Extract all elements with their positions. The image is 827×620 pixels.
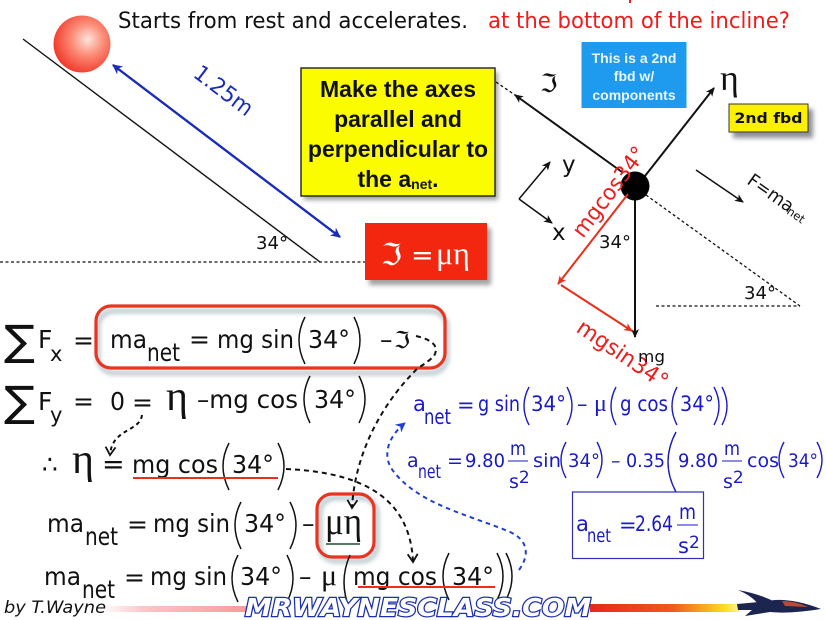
diagram: free body diagram	[496, 58, 808, 395]
blue equation: a net symbolic: g cos	[620, 392, 668, 416]
equation: ma net with mu eta: μη	[325, 501, 362, 543]
result box: a net equals 2.64: a	[576, 512, 589, 536]
equation: therefore normal force	[42, 437, 284, 490]
diagram: incline with ball	[0, 16, 366, 262]
footer: flame trail	[590, 604, 740, 612]
equation group: sum of forces x	[4, 306, 447, 373]
label mgsin34: mgsin34°	[572, 315, 673, 395]
equation text: 34°	[308, 325, 350, 354]
equation: ma net with mu eta: net	[85, 522, 118, 551]
blue equation: a net numeric: s	[723, 471, 733, 493]
result box: a net equals 2.64: 2.64	[635, 512, 673, 536]
blue equation: a net numeric: 34°	[568, 450, 600, 472]
result box: a net equals 2.64: net	[587, 525, 611, 547]
normal arrow	[645, 88, 714, 176]
label mgcos34: mgcos34°	[568, 142, 652, 243]
equation: sum of forces y: y	[50, 403, 62, 427]
label mg: mg	[638, 347, 665, 366]
dotted arrow: mg cos to final equation	[286, 469, 413, 562]
blue equation: a net numeric: m	[510, 438, 526, 460]
equation: sum of forces y: F	[38, 387, 52, 416]
equation text: =	[73, 326, 94, 355]
dotted arrow: eta substitution	[110, 415, 142, 455]
blue equation: a net symbolic: μ	[594, 391, 607, 417]
label F=ma net: F=ma	[743, 170, 798, 217]
blue equation: a net numeric: s	[509, 471, 519, 493]
normal symbol: η	[720, 58, 739, 98]
equation: sum of forces y: –mg cos	[197, 385, 298, 414]
red underline	[133, 477, 278, 479]
dotted horizontal	[656, 305, 800, 307]
equation text: ma	[110, 325, 147, 354]
red underline	[358, 586, 495, 588]
equation text: –	[380, 325, 392, 354]
callout: 2nd fbd with components	[582, 42, 686, 108]
label net subscript: net	[784, 204, 808, 227]
blue equation: a net symbolic: –	[577, 392, 588, 416]
axes arrows	[519, 162, 552, 223]
callout: 2nd fbd with components: This is a 2nd	[592, 50, 676, 66]
red highlight box	[96, 306, 447, 373]
blue equation: a net symbolic: g sin	[478, 392, 520, 416]
equation: sum of forces y: =	[73, 387, 94, 416]
incline base dotted line	[0, 261, 366, 263]
callout: make the axes parallel: .	[432, 166, 439, 192]
blue equation: a net numeric: 2	[733, 468, 744, 488]
label: 2nd fbd: 2nd fbd	[734, 111, 802, 127]
icon: rocket	[737, 590, 821, 616]
equation: sum of forces y: ∑	[4, 377, 35, 426]
equation: therefore normal force: η	[72, 437, 94, 483]
acceleration direction arrow	[696, 170, 743, 202]
body	[620, 172, 650, 200]
callout: friction formula: ℑ	[381, 238, 402, 273]
callout: friction formula: =	[411, 240, 434, 271]
incline surface	[23, 39, 320, 262]
equation text: mg sin	[217, 325, 294, 354]
result box: a net equals 2.64: s	[678, 534, 689, 558]
equation: sum of forces y: =	[132, 388, 153, 417]
angle at dotted incline: 34°	[744, 283, 776, 304]
blue equation: a net numeric: cos	[747, 450, 779, 472]
equation: sum of forces y: η	[166, 374, 188, 420]
equation: final ma net: 34°	[240, 562, 282, 591]
blue equation: a net symbolic	[413, 387, 727, 429]
friction symbol: ℑ	[540, 69, 557, 98]
blue equation: a net numeric: 0.35	[626, 450, 665, 472]
distance label: 1.25m	[188, 61, 258, 122]
callout: make the axes parallel: perpendicular to	[308, 136, 488, 162]
sigma: ∑	[4, 316, 35, 365]
blue equation: a net numeric: 9.80	[678, 450, 718, 472]
cropped descender of upper question line	[629, 0, 631, 3]
heading: starts from rest: Starts from rest and accelerates.	[118, 8, 468, 34]
equation text: =	[189, 325, 210, 354]
equation: sum of forces y: 34°	[314, 385, 356, 414]
equation text: ℑ	[394, 328, 410, 354]
weight component mgcos arrow	[558, 194, 628, 284]
blue equation: a net numeric: sin	[533, 450, 561, 472]
result box: a net equals 2.64	[572, 492, 704, 558]
equation: ma net with mu eta: –	[302, 509, 314, 538]
equation: therefore normal force: =	[102, 449, 125, 480]
equation: final ma net: net	[82, 575, 115, 604]
green underline	[326, 543, 360, 545]
equation: ma net with mu eta: ma	[47, 509, 84, 538]
blue equation: a net numeric: 2	[519, 468, 530, 488]
blue equation: a net symbolic: net	[424, 405, 451, 429]
equation: final ma net: mg cos	[353, 562, 437, 591]
distance arrow	[113, 65, 340, 237]
footer: author credit: by T.Wayne	[4, 598, 106, 618]
equation: ma net with mu eta: =	[127, 510, 148, 539]
equation: final ma net	[44, 553, 512, 610]
equation text: net	[147, 338, 180, 367]
equation: final ma net: μ	[321, 559, 337, 592]
axis y: y	[562, 152, 576, 178]
equation: final ma net: –	[299, 562, 312, 591]
callout: friction formula: μη	[436, 235, 470, 271]
angle at body: 34°	[599, 232, 631, 253]
callout: friction formula	[365, 223, 491, 285]
blue equation: a net numeric: 9.80	[465, 450, 505, 472]
weight component mgsin arrow	[561, 285, 632, 331]
axis x: x	[552, 220, 566, 246]
footer: pink trail	[100, 606, 250, 612]
equation: therefore normal force: 34°	[232, 450, 274, 479]
blue equation: a net numeric: m	[724, 438, 740, 460]
blue equation: a net symbolic: 34°	[531, 392, 566, 416]
equation: final ma net: =	[124, 563, 145, 592]
highlight box	[317, 494, 377, 561]
equation: final ma net: mg sin	[150, 562, 227, 591]
blue equation: a net numeric: net	[418, 461, 441, 483]
equation: final ma net: ma	[44, 562, 81, 591]
equation: final ma net: 34°	[452, 562, 494, 591]
equation: therefore normal force: mg cos	[132, 450, 218, 479]
equation: ma net with mu eta: 34°	[244, 509, 286, 538]
callout: 2nd fbd with components: fbd w/	[614, 68, 654, 84]
blue equation: a net numeric: a	[407, 450, 419, 472]
callout: make the axes parallel: Make the axes	[320, 76, 476, 102]
equation: ma net with mu eta: mg sin	[153, 509, 230, 538]
equation: ma net with mu eta	[47, 494, 377, 561]
blue equation: a net symbolic: a	[413, 392, 426, 416]
equation: sum of forces y	[4, 374, 365, 427]
equation: sum of forces y: 0	[110, 387, 125, 416]
equation text: x	[50, 342, 62, 366]
equation text	[38, 317, 410, 367]
result box: a net equals 2.64: 2	[689, 533, 700, 553]
dotted arrow: friction to mu eta	[352, 336, 436, 508]
label: 2nd fbd	[729, 104, 813, 138]
result box: a net equals 2.64: m	[679, 500, 696, 524]
callout: make the axes parallel	[301, 68, 498, 200]
weight arrow	[634, 198, 636, 337]
dotted extension of incline	[496, 82, 515, 95]
equation text: F	[38, 325, 52, 354]
red ball	[54, 16, 110, 72]
equation: therefore normal force: ∴	[42, 450, 58, 479]
incline angle: 34°	[256, 233, 288, 254]
dotted blue arrow: to a net equation	[387, 423, 526, 570]
blue equation: a net symbolic: =	[457, 393, 475, 417]
callout: make the axes parallel: parallel and	[334, 106, 462, 132]
blue equation: a net numeric: –	[611, 450, 620, 472]
friction arrow	[515, 95, 622, 172]
dotted incline through body	[646, 195, 800, 306]
callout: 2nd fbd with components: components	[592, 87, 676, 103]
blue equation: a net symbolic: 34°	[680, 392, 714, 416]
result box: a net equals 2.64: =	[619, 513, 637, 537]
blue equation: a net numeric: 34°	[788, 450, 818, 472]
blue equation: a net numeric	[407, 432, 822, 493]
callout: make the axes parallel: net	[411, 176, 432, 192]
blue equation: a net numeric: =	[447, 450, 463, 472]
callout: make the axes parallel: the a	[357, 166, 411, 192]
heading: question in red: at the bottom of the incline?	[488, 8, 790, 34]
